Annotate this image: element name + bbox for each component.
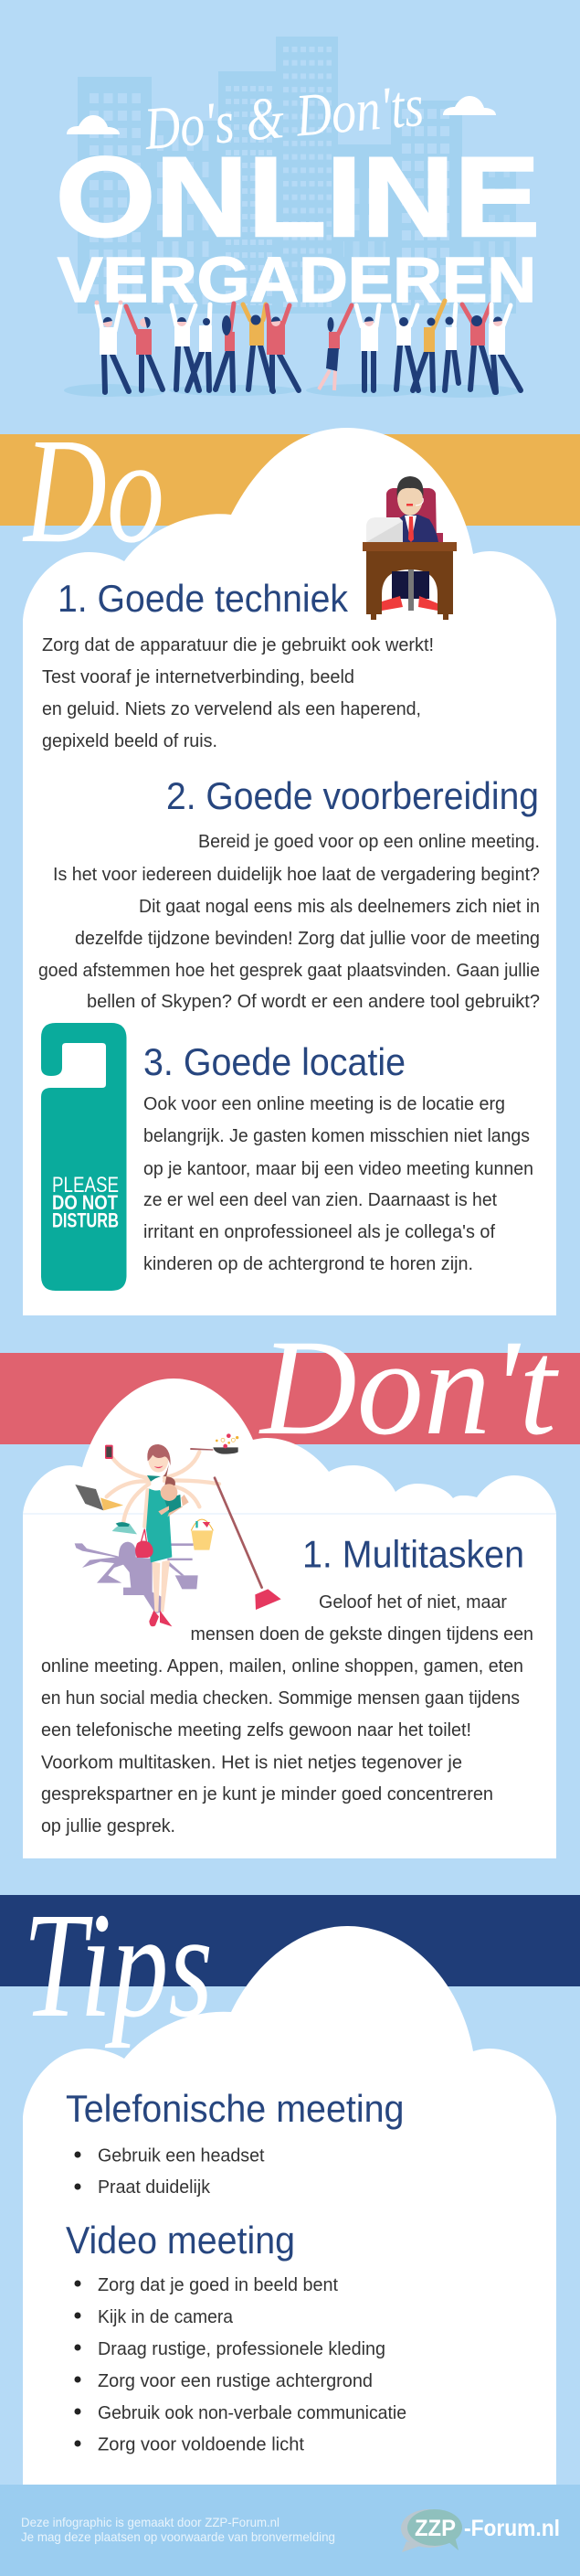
title: vergaderen: VERGADEREN <box>58 244 536 315</box>
person 8 <box>319 305 352 390</box>
text block: online meeting. Appen, mailen, online shoppen, gamen, eten <box>41 1656 523 1677</box>
text block: een telefonische meeting zelfs gewoon naar het toilet! <box>41 1720 471 1740</box>
person 2 <box>126 306 163 390</box>
text block <box>42 635 434 751</box>
heading: 1. Goede techniek <box>58 577 349 620</box>
iron <box>112 1523 137 1534</box>
logo: zzp-forum: -Forum.nl <box>464 2516 560 2541</box>
footer credit text: Deze infographic is gemaakt door ZZP-Forum.nl <box>21 2515 279 2529</box>
laptop <box>75 1485 103 1510</box>
text block: belangrijk. Je gasten komen misschien niet langs <box>143 1126 530 1146</box>
text block: Voorkom multitasken. Het is niet netjes tegenover je <box>41 1753 462 1773</box>
label: disturb: DISTURB <box>52 1208 119 1232</box>
footer credit text: Je mag deze plaatsen op voorwaarde van bronvermelding <box>21 2529 335 2544</box>
text block: Test vooraf je internetverbinding, beeld <box>42 667 354 687</box>
section 2: goede voorbereiding <box>38 774 540 1012</box>
head <box>148 1447 168 1473</box>
person 13 <box>462 304 495 392</box>
text block: mensen doen de gekste dingen tijdens een <box>190 1624 533 1645</box>
icon: left cloud <box>67 115 120 134</box>
person 7 <box>267 305 299 390</box>
heading: 3. Goede locatie <box>143 1040 406 1083</box>
section: telefonische meeting <box>66 2087 404 2198</box>
text block: op je kantoor, maar bij een video meeting kunnen <box>143 1159 533 1179</box>
person 9 <box>356 305 379 390</box>
bullet list: Gebruik ook non-verbale communicatie <box>98 2403 406 2423</box>
shoes <box>149 1611 159 1626</box>
text block: irritant en onprofessioneel als je collega's of <box>143 1222 495 1242</box>
bullet list: Zorg voor een rustige achtergrond <box>98 2371 373 2391</box>
legs <box>153 1560 170 1612</box>
illustration: man behind desk with headset <box>363 476 457 620</box>
panel: don't cloud <box>23 1378 556 1858</box>
text block: Is het voor iedereen duidelijk hoe laat de vergadering begint? <box>53 865 540 885</box>
person 12 <box>445 304 459 390</box>
bullet list: Zorg dat je goed in beeld bent <box>98 2275 338 2295</box>
person 6 <box>243 304 273 391</box>
text block <box>38 832 540 1012</box>
band: don't <box>0 1353 580 1444</box>
text block <box>143 1094 533 1274</box>
dress <box>146 1488 172 1562</box>
heading: tips: Tips <box>23 1881 213 2049</box>
label: please: PLEASE <box>52 1173 119 1198</box>
text block: bellen of Skypen? Of wordt er een andere tool gebruikt? <box>87 992 540 1012</box>
bucket <box>191 1530 213 1550</box>
illustration: multitasking woman <box>75 1433 281 1626</box>
icon: right cloud <box>443 96 496 115</box>
person 1 <box>95 300 129 392</box>
person 11 <box>413 301 445 390</box>
text block: Bereid je goed voor op een online meeting. <box>198 832 540 852</box>
panel: do cloud <box>23 428 556 1315</box>
text block: Ook voor een online meeting is de locatie erg <box>143 1094 505 1114</box>
icon: do not disturb door hanger <box>41 1023 126 1291</box>
footer bar <box>0 2485 580 2576</box>
text block: gesprekspartner en je kunt je minder goed concentreren <box>41 1784 493 1804</box>
heading: Telefonische meeting <box>66 2087 404 2130</box>
logo: zzp-forum: ZZP <box>415 2516 456 2541</box>
person 3 <box>172 305 199 390</box>
text block: dezelfde tijdzone bevinden! Zorg dat jullie voor de meeting <box>75 929 540 949</box>
bullet list: Gebruik een headset <box>98 2146 265 2166</box>
logo: zzp-forum <box>401 2509 560 2552</box>
bullet list: Praat duidelijk <box>98 2177 211 2198</box>
text block: kinderen op de achtergrond te horen zijn. <box>143 1254 473 1274</box>
illustration: crowd of people holding up the title <box>64 300 521 398</box>
text block: Dit gaat nogal eens mis als deelnemers zich niet in <box>139 897 540 917</box>
text block: gepixeld beeld of ruis. <box>42 731 217 751</box>
broom <box>215 1478 262 1588</box>
section 1: goede techniek <box>42 577 434 751</box>
pan <box>190 1448 213 1451</box>
section 3: goede locatie <box>143 1040 533 1274</box>
person 5 <box>216 303 235 390</box>
title: script subtitle: Do's & Don'ts <box>141 72 426 163</box>
text block: Zorg dat de apparatuur die je gebruikt ook werkt! <box>42 635 434 655</box>
footer credit text <box>21 2515 335 2544</box>
bullet list: Draag rustige, professionele kleding <box>98 2339 385 2359</box>
text block: Geloof het of niet, maar <box>319 1592 507 1613</box>
section: multitasken <box>41 1532 533 1836</box>
text block: en hun social media checken. Sommige mensen gaan tijdens <box>41 1688 520 1708</box>
section: video meeting <box>66 2219 406 2455</box>
label: do not: DO NOT <box>52 1191 118 1214</box>
handbag <box>135 1541 153 1558</box>
heading: do: Do <box>22 407 164 574</box>
band: do <box>0 434 580 526</box>
band: tips <box>0 1895 580 1986</box>
heading: don't: Don't <box>258 1312 559 1464</box>
bullet list: Zorg voor voldoende licht <box>98 2435 304 2455</box>
text block: op jullie gesprek. <box>41 1816 175 1836</box>
title: online: ONLINE <box>56 134 540 261</box>
text block <box>41 1592 533 1836</box>
person 10 <box>394 305 418 390</box>
heading: 1. Multitasken <box>302 1532 524 1576</box>
panel: tips cloud <box>23 1926 556 2485</box>
arms <box>107 1452 219 1527</box>
bullet list: Kijk in de camera <box>98 2307 234 2327</box>
phone <box>105 1445 113 1459</box>
shadow <box>75 1542 198 1613</box>
text block: ze er wel een deel van zien. Daarnaast is het <box>143 1190 497 1210</box>
text block: en geluid. Niets zo vervelend als een haperend, <box>42 699 421 719</box>
illustration: city skyline <box>78 37 516 314</box>
bullet list <box>75 2146 265 2198</box>
person 14 <box>489 304 521 392</box>
person 4 <box>187 304 212 390</box>
heading: Video meeting <box>66 2219 295 2262</box>
heading: 2. Goede voorbereiding <box>166 774 539 817</box>
baby <box>164 1495 181 1513</box>
text block: goed afstemmen hoe het gesprek gaat plaatsvinden. Gaan jullie <box>38 961 540 981</box>
bullet list <box>75 2275 406 2455</box>
